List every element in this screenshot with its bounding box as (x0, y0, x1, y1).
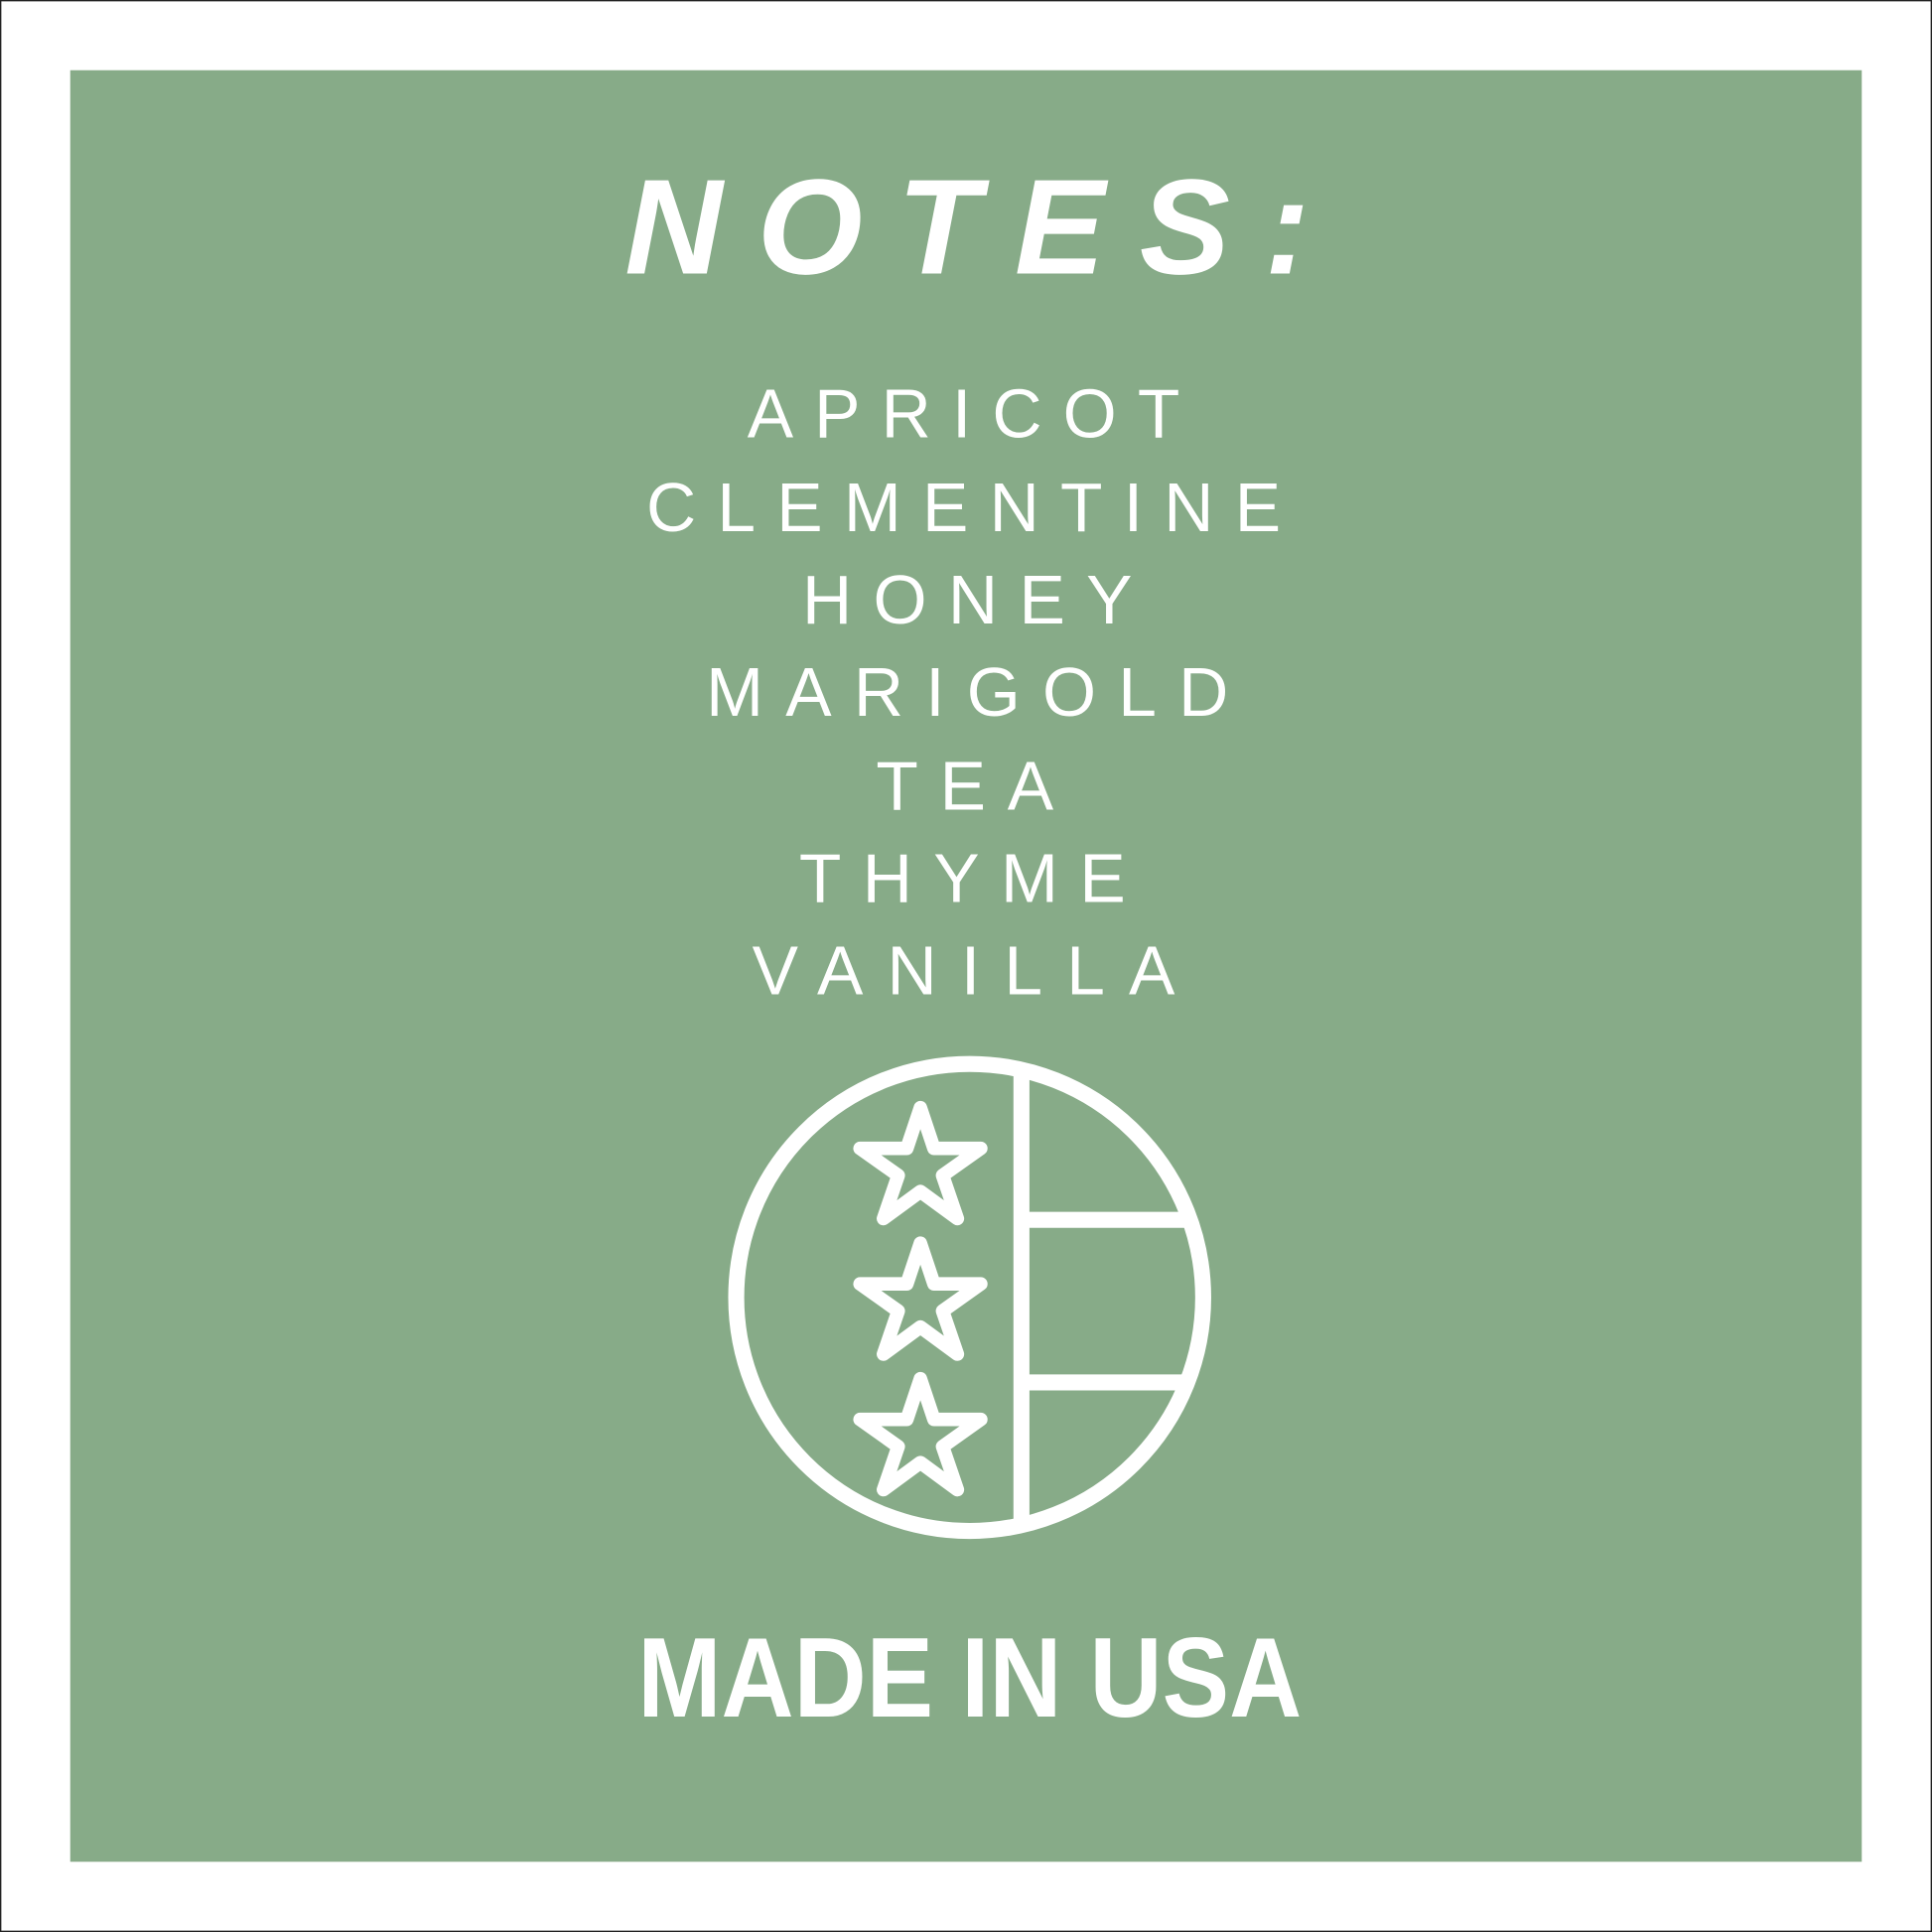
text block: notes list: VANILLA (753, 932, 1175, 1010)
footer label: MADE IN USA (637, 1615, 1302, 1741)
text block: notes list: MARIGOLD (706, 653, 1228, 731)
icon: USA flag globe (737, 1064, 1203, 1531)
text block: notes list: CLEMENTINE (646, 469, 1281, 546)
text block: notes list: TEA (876, 747, 1054, 824)
text block: notes list: THYME (799, 839, 1126, 916)
text block: notes list (646, 375, 1281, 1010)
text block: notes list: APRICOT (748, 375, 1179, 453)
text block: notes list: HONEY (802, 561, 1133, 638)
title: NOTES: (624, 151, 1310, 303)
